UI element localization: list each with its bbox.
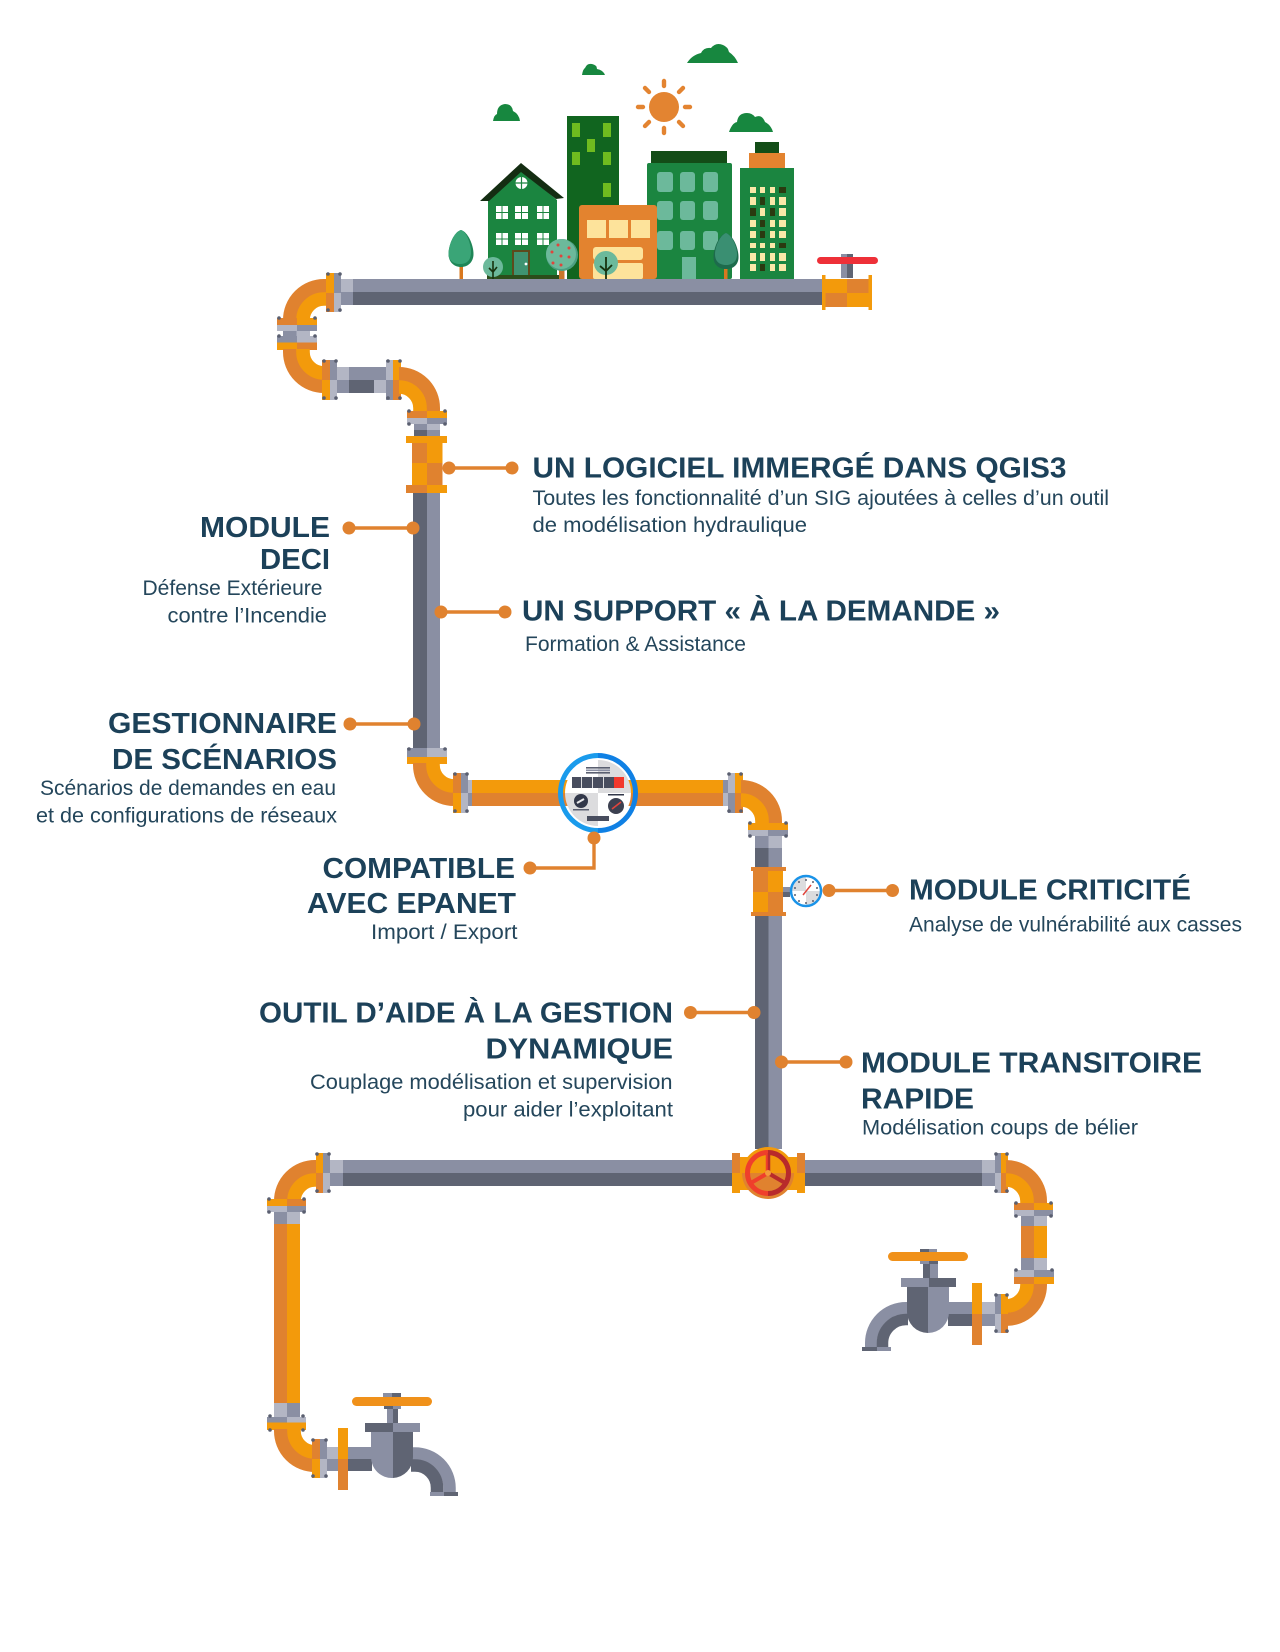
elbow 3 <box>399 374 433 412</box>
heading: GESTIONNAIRE <box>108 708 337 740</box>
connector <box>775 1056 852 1068</box>
description: de modélisation hydraulique <box>532 513 807 537</box>
pipe: top horizontal <box>340 279 823 305</box>
icon: tree left <box>448 230 474 279</box>
pipe: right branch <box>982 1152 1054 1333</box>
pipe: lower horizontal <box>330 1160 995 1186</box>
heading: COMPATIBLE <box>322 853 515 885</box>
description: pour aider l’exploitant <box>463 1098 673 1122</box>
flange right <box>723 772 743 813</box>
icon: fruit tree <box>546 239 578 279</box>
icon: pressure gauge <box>783 876 821 906</box>
callout: EPANET <box>307 832 600 944</box>
icon: small tree on shop <box>594 251 618 279</box>
callout: module transitoire <box>775 1048 1202 1140</box>
icon: right tap <box>862 1249 982 1351</box>
heading <box>200 512 330 576</box>
connector <box>524 832 600 874</box>
description: contre l’Incendie <box>168 604 327 628</box>
pipe: second vertical with gauge sleeve <box>748 821 788 1149</box>
pipe: middle horizontal orange run <box>420 763 775 824</box>
pipe: first vertical with orange sleeve <box>406 409 447 764</box>
connector <box>822 884 899 897</box>
heading: AVEC EPANET <box>307 888 517 920</box>
flange upper <box>315 1152 331 1193</box>
description <box>36 776 337 828</box>
vertical section <box>1014 1201 1054 1284</box>
description: Analyse de vulnérabilité aux casses <box>909 912 1242 936</box>
heading: DE SCÉNARIOS <box>112 744 337 776</box>
description: et de configurations de réseaux <box>36 804 337 828</box>
callout: support <box>434 596 1000 656</box>
building: house <box>480 163 564 279</box>
heading: OUTIL D’AIDE À LA GESTION <box>259 998 673 1030</box>
flange 1 <box>326 272 342 312</box>
heading <box>259 998 673 1066</box>
building: narrow tower <box>740 142 794 279</box>
heading: UN SUPPORT « À LA DEMANDE » <box>522 596 1000 628</box>
heading: UN LOGICIEL IMMERGÉ DANS QGIS3 <box>532 452 1066 484</box>
elbow 7 <box>1006 1284 1040 1319</box>
description <box>142 576 327 628</box>
icon: water meter <box>560 756 636 830</box>
flange pair middle <box>277 316 317 350</box>
flange <box>994 1152 1009 1193</box>
icon: clouds <box>493 44 773 132</box>
elbow 8 <box>281 1167 318 1201</box>
description: Couplage modélisation et supervision <box>310 1070 672 1094</box>
icon: left tap <box>338 1393 458 1496</box>
description: Formation & Assistance <box>525 632 746 656</box>
description <box>310 1070 673 1122</box>
icon: sun <box>638 81 690 133</box>
elbow 5 <box>741 787 775 824</box>
description: Modélisation coups de bélier <box>862 1116 1138 1140</box>
callout: gestionnaire de scenarios <box>36 708 420 828</box>
heading: DECI <box>260 544 330 576</box>
building: large office <box>647 151 732 279</box>
pipe: left branch <box>267 1152 338 1478</box>
vertical orange section <box>267 1197 306 1432</box>
flange lower <box>311 1438 338 1478</box>
heading <box>108 708 337 776</box>
icon: dark tree right <box>714 233 738 279</box>
building: shop <box>579 205 657 279</box>
elbow 6 <box>1006 1167 1040 1204</box>
description: Toutes les fonctionnalité d’un SIG ajoutées à celles d’un outil <box>532 486 1109 510</box>
icon: small tree by house <box>483 257 503 279</box>
flange lower <box>982 1293 1009 1333</box>
heading: MODULE TRANSITOIRE <box>861 1048 1202 1080</box>
illustration: city skyline <box>448 44 794 279</box>
flange left <box>453 772 472 813</box>
connector <box>434 606 512 618</box>
icon: red wheel valve <box>732 1147 805 1199</box>
connector <box>442 462 518 474</box>
flange and short grey pipe <box>322 359 402 400</box>
heading: MODULE CRITICITÉ <box>909 874 1191 906</box>
pipe: upper left S-bend <box>277 272 433 412</box>
heading: RAPIDE <box>861 1084 974 1116</box>
callout: outil d'aide a la gestion <box>259 998 760 1122</box>
description: Scénarios de demandes en eau <box>40 776 336 800</box>
elbow 4 <box>420 763 454 799</box>
elbow 2 <box>290 349 324 386</box>
heading: DYNAMIQUE <box>486 1034 673 1066</box>
callout: QGIS3 <box>442 452 1109 537</box>
heading <box>307 853 517 920</box>
connector <box>684 1006 760 1019</box>
elbow 1 <box>290 286 328 320</box>
connector <box>344 718 420 730</box>
description: Import / Export <box>371 920 518 944</box>
connector <box>342 522 420 534</box>
description <box>532 486 1109 537</box>
elbow 9 <box>281 1429 315 1465</box>
icon: top valve with red handle <box>817 254 878 310</box>
heading: MODULE <box>200 512 330 544</box>
callout: module criticite <box>822 874 1242 936</box>
building: tall dark tower <box>567 116 619 279</box>
heading <box>861 1048 1202 1116</box>
description: Défense Extérieure <box>142 576 322 600</box>
callout: module DECI <box>142 512 420 628</box>
